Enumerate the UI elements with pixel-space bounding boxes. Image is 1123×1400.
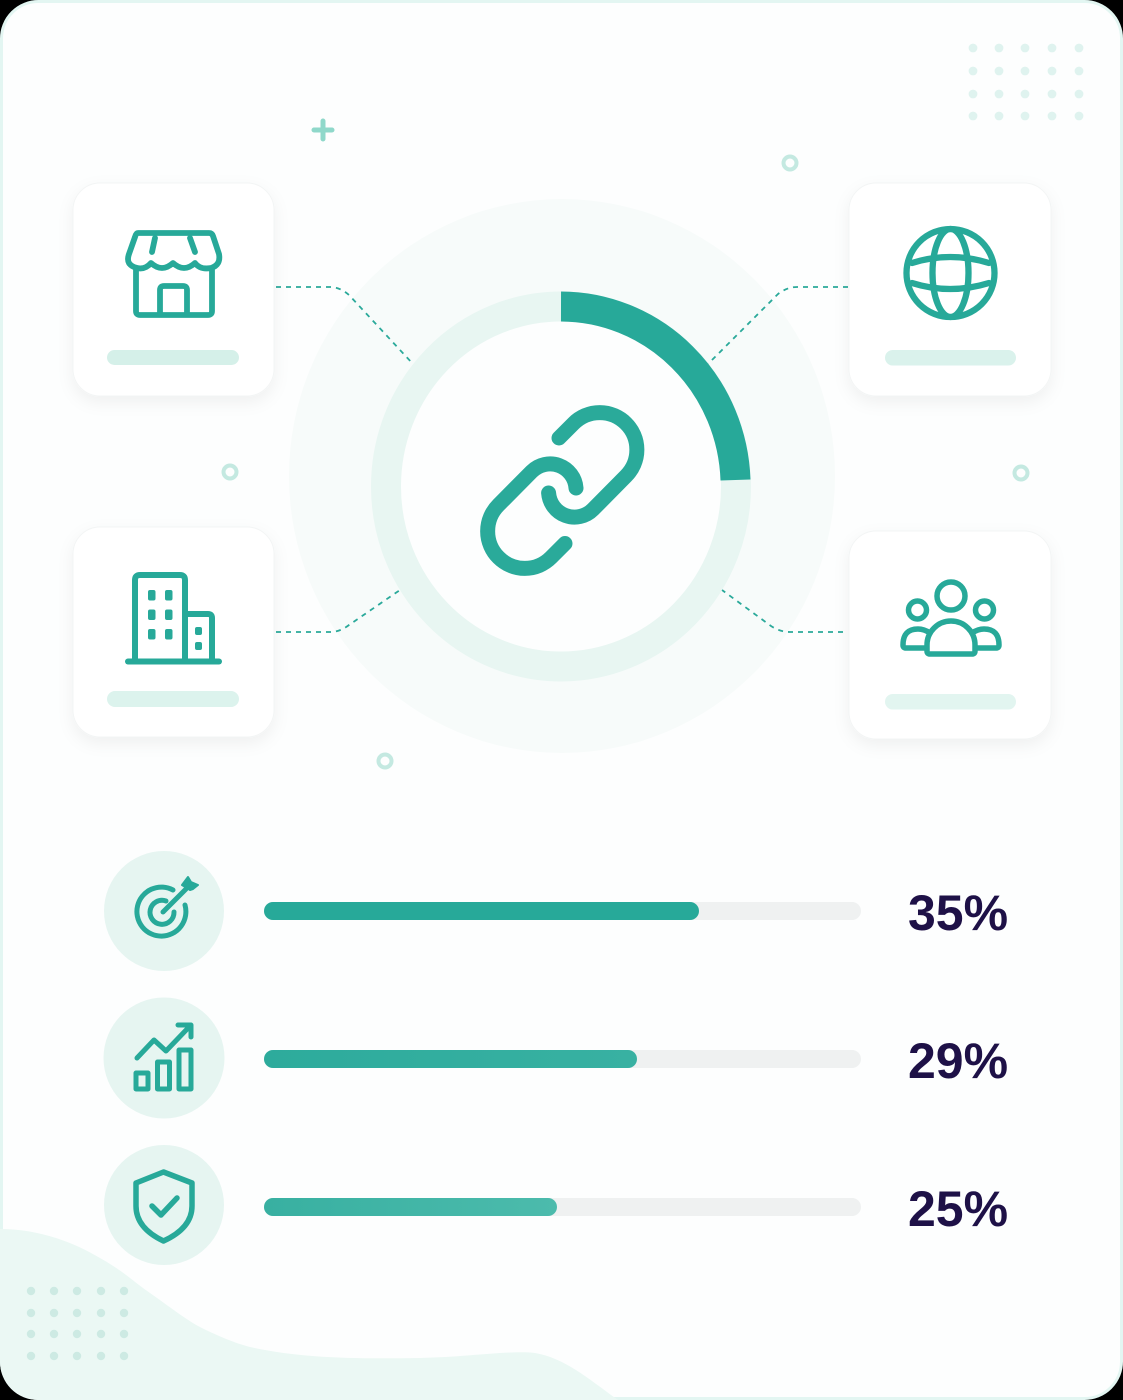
value 25%: 25%	[908, 1181, 1008, 1237]
row: target 35%	[104, 851, 1008, 971]
icon: chain link	[488, 413, 637, 568]
small ring decorations	[224, 156, 1028, 768]
label bar	[885, 350, 1016, 366]
icon: group of people	[903, 582, 999, 654]
progress bar 29%	[264, 1050, 861, 1068]
progress bar 35%	[264, 902, 861, 920]
icon badge: shield	[104, 1145, 224, 1265]
label bar	[107, 350, 239, 365]
label bar	[885, 694, 1016, 710]
dot grid: bottom left	[27, 1287, 128, 1360]
icon: office building	[128, 575, 219, 662]
card: building	[73, 527, 274, 737]
connectors	[276, 287, 848, 632]
card: globe	[849, 183, 1051, 396]
progress bar 25%	[264, 1198, 861, 1216]
row: growth 29%	[104, 998, 1008, 1118]
dot grid: top right	[969, 44, 1083, 120]
card: people	[849, 531, 1051, 739]
icon: storefront	[128, 233, 219, 315]
value 35%: 35%	[908, 885, 1008, 941]
central halo	[289, 199, 835, 753]
label bar	[107, 691, 239, 707]
row: shield 25%	[104, 1145, 1008, 1265]
central donut chart	[386, 306, 736, 666]
plus decoration	[314, 121, 332, 139]
icon badge: growth chart	[104, 998, 224, 1118]
card: store	[73, 183, 274, 396]
icon badge: target	[104, 851, 224, 971]
value 29%: 29%	[908, 1033, 1008, 1089]
icon: globe	[906, 229, 994, 317]
bottom-left wave	[0, 1229, 618, 1400]
